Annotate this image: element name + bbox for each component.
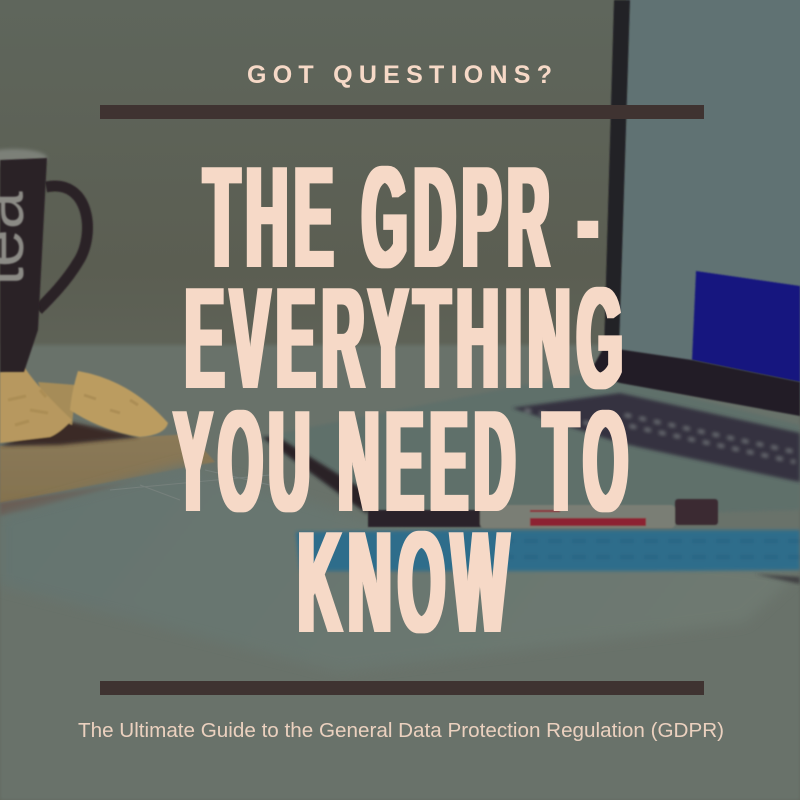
laptop lower bezel: [590, 347, 800, 416]
monitor bezel: [604, 0, 630, 350]
laptop base: [260, 372, 800, 520]
main title: [174, 136, 634, 663]
kicker text: GOT QUESTIONS?: [247, 61, 552, 89]
pencil streak on the paper: [755, 574, 800, 584]
monitor screen: [610, 0, 800, 400]
top divider bar: [100, 105, 704, 119]
desk surface: [0, 345, 800, 800]
mug with tea lettering: [0, 149, 87, 372]
ruler: [296, 530, 800, 571]
board shadow: [0, 482, 135, 516]
bottom divider bar: [100, 681, 704, 695]
laptop front edge shadow: [262, 437, 375, 514]
keyboard: [512, 393, 800, 482]
wooden board: [0, 434, 215, 503]
paper notebook: [0, 465, 800, 672]
cookies: [0, 365, 168, 446]
blue screen window: [692, 271, 800, 382]
marker pen: [368, 499, 718, 528]
subtitle: The Ultimate Guide to the General Data Protection Regulation (GDPR): [78, 720, 724, 742]
wall: [0, 0, 800, 360]
paper table lines: [110, 470, 270, 500]
